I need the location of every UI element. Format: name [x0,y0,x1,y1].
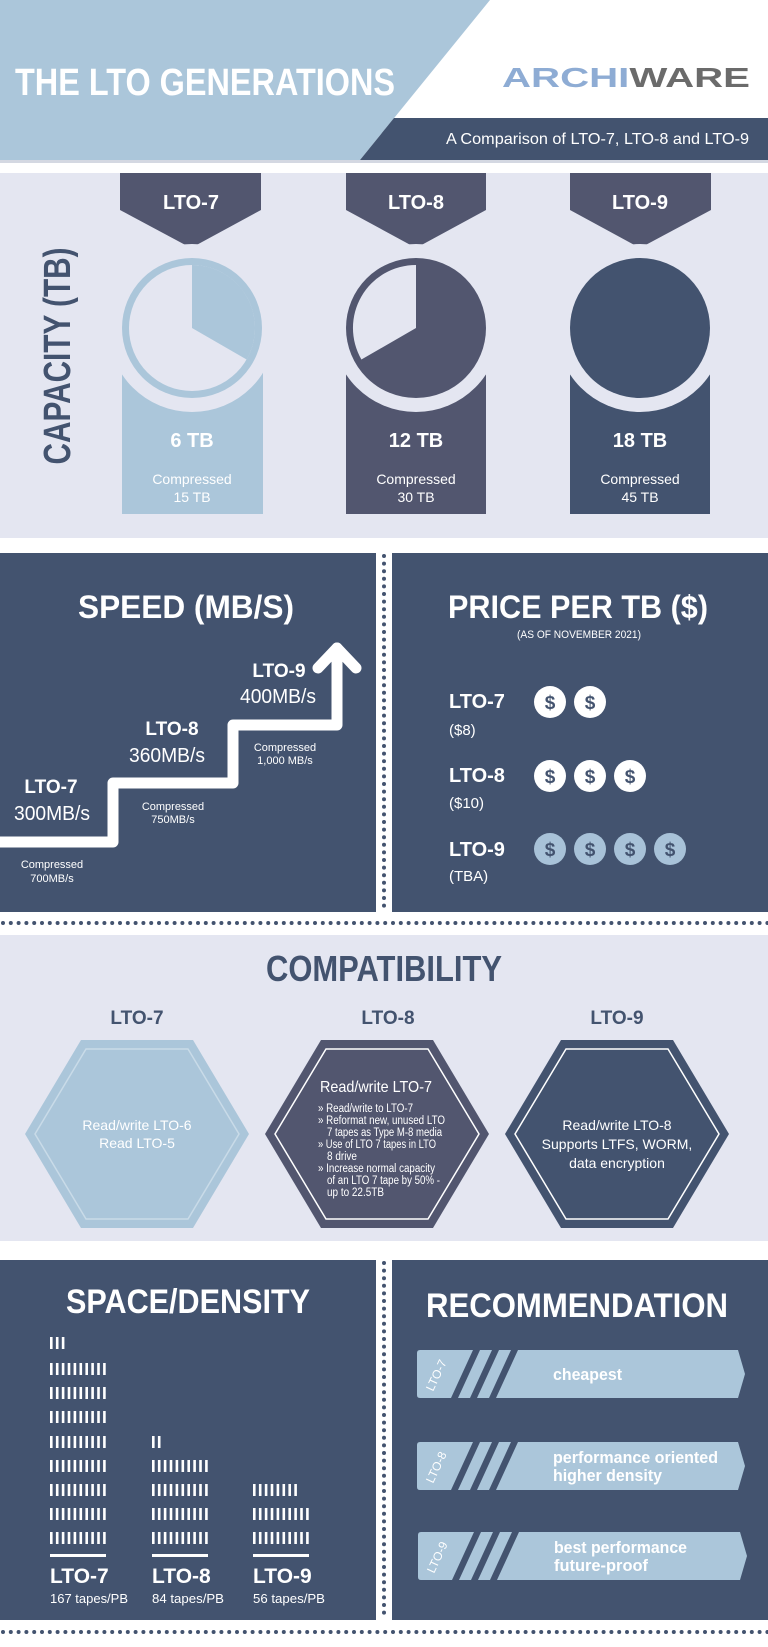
icon: dollar coins: $ [585,767,596,788]
price rows [449,691,505,885]
tapes: LTO-9 [253,1484,325,1606]
rec: LTO-8 [417,1442,745,1490]
hex: LTO-8: of an LTO 7 tape by 50% - [327,1175,440,1187]
rec: LTO-8: LTO-8 [423,1449,450,1485]
speed labels: Compressed [142,801,204,813]
compat labels: LTO-7 [110,1008,164,1029]
icon: dollar coins: $ [665,840,676,861]
speed labels: Compressed [21,859,83,871]
icon: dollar coins: $ [585,840,596,861]
subtitle: A Comparison of LTO-7, LTO-8 and LTO-9 [446,131,749,148]
tapes: LTO-8: LTO-8 [152,1565,211,1588]
header light banner [0,0,490,160]
capacity LTO-8 [332,173,500,514]
tapes: LTO-9: 56 tapes/PB [253,1591,325,1606]
hex: LTO-9: Read/write LTO-8 [562,1117,672,1133]
speed labels: 700MB/s [30,873,74,885]
speed labels: 360MB/s [129,745,205,767]
space heading: SPACE/DENSITY [66,1283,310,1321]
speed heading: SPEED (MB/S) [78,589,294,625]
capacity LTO-8: 30 TB [397,489,435,505]
panel: space/density [0,1260,376,1620]
capacity LTO-8: Compressed [376,471,456,487]
price rows: LTO-7 [449,691,505,713]
icon: dollar coins: $ [545,693,556,714]
compat labels: LTO-9 [590,1008,644,1029]
rec: LTO-7 [417,1350,745,1398]
hex: LTO-8: 8 drive [327,1151,357,1163]
panel: price: (AS OF NOVEMBER 2021) [517,629,641,641]
logo: ARCHI WARE [502,62,750,93]
recommendation heading: RECOMMENDATION [426,1287,728,1325]
tapes: LTO-8 [152,1436,224,1606]
rec: LTO-8: higher density [553,1466,663,1485]
icon: dollar coins: $ [545,767,556,788]
compatibility heading: COMPATIBILITY [266,948,502,989]
hex: LTO-9 [505,1040,729,1228]
tapes: LTO-7: 167 tapes/PB [50,1591,128,1606]
hex: LTO-7 [25,1040,249,1228]
tapes: LTO-7: LTO-7 [50,1565,109,1588]
speed labels [14,661,316,885]
speed labels: 750MB/s [151,814,195,826]
hex: LTO-8: » Reformat new, unused LTO [318,1115,445,1127]
hex: LTO-8: up to 22.5TB [327,1187,384,1199]
speed labels: 400MB/s [240,686,316,708]
title: THE LTO GENERATIONS [15,62,395,104]
hex: LTO-8: Read/write LTO-7 [320,1079,432,1096]
rec: LTO-7: cheapest [553,1365,622,1384]
capacity heading: CAPACITY (TB) [37,248,79,464]
capacity LTO-9: 18 TB [613,430,667,452]
hex: LTO-9: Supports LTFS, WORM, [542,1136,692,1152]
price heading: PRICE PER TB ($) [448,589,708,625]
capacity LTO-7 [108,173,276,514]
hex: LTO-8: » Use of LTO 7 tapes in LTO [318,1139,436,1151]
panel: speed [0,553,376,912]
panel: compatibility [0,935,768,1241]
hex: LTO-7: Read/write LTO-6 [82,1117,192,1133]
tapes: LTO-8: 84 tapes/PB [152,1591,224,1606]
hex: LTO-8 [265,1040,489,1228]
tapes: LTO-7 [50,1337,128,1606]
hex: LTO-9: data encryption [569,1155,665,1171]
panel: recommendation [392,1260,768,1620]
rec: LTO-9: future-proof [554,1556,648,1575]
rec: LTO-9 [418,1532,747,1580]
capacity LTO-7: 6 TB [170,430,214,452]
rec: LTO-7: LTO-7 [423,1357,450,1393]
price rows: ($10) [449,795,484,812]
capacity LTO-9: Compressed [600,471,680,487]
price rows: (TBA) [449,868,488,885]
capacity LTO-9: LTO-9 [612,192,668,214]
speed labels: Compressed [254,742,316,754]
capacity LTO-9: 45 TB [621,489,659,505]
speed labels: LTO-7 [24,777,78,798]
rec: LTO-8: performance oriented [553,1448,718,1467]
hex: LTO-8: » Read/write to LTO-7 [318,1103,413,1115]
hex: LTO-7: Read LTO-5 [99,1135,175,1151]
capacity LTO-7: LTO-7 [163,192,219,214]
icon: dollar coins [534,686,686,865]
tapes: LTO-9: LTO-9 [253,1565,312,1588]
panel: price [392,553,768,912]
capacity LTO-7: 15 TB [173,489,211,505]
speed labels: LTO-8 [145,719,199,740]
icon: dollar coins: $ [625,767,636,788]
header [0,0,768,163]
capacity LTO-8: LTO-8 [388,192,444,214]
icon: dollar coins: $ [625,840,636,861]
speed labels: 1,000 MB/s [257,755,313,767]
speed labels: LTO-9 [252,661,306,682]
hex: LTO-8: 7 tapes as Type M-8 media [327,1127,443,1139]
capacity LTO-9 [556,173,724,514]
rec: LTO-9: LTO-9 [424,1539,451,1575]
arrow: staircase [0,648,356,842]
price rows: LTO-8 [449,765,505,787]
panel: capacity [0,173,768,538]
compat labels [110,1008,644,1029]
capacity LTO-8: 12 TB [389,430,443,452]
subtitle bar [360,118,768,160]
hex: LTO-8: » Increase normal capacity [318,1163,435,1175]
price rows: ($8) [449,722,476,739]
speed labels: 300MB/s [14,803,90,825]
price rows: LTO-9 [449,839,505,861]
icon: dollar coins: $ [585,693,596,714]
rec: LTO-9: best performance [554,1538,687,1557]
icon: dollar coins: $ [545,840,556,861]
capacity LTO-7: Compressed [152,471,232,487]
compat labels: LTO-8 [361,1008,415,1029]
